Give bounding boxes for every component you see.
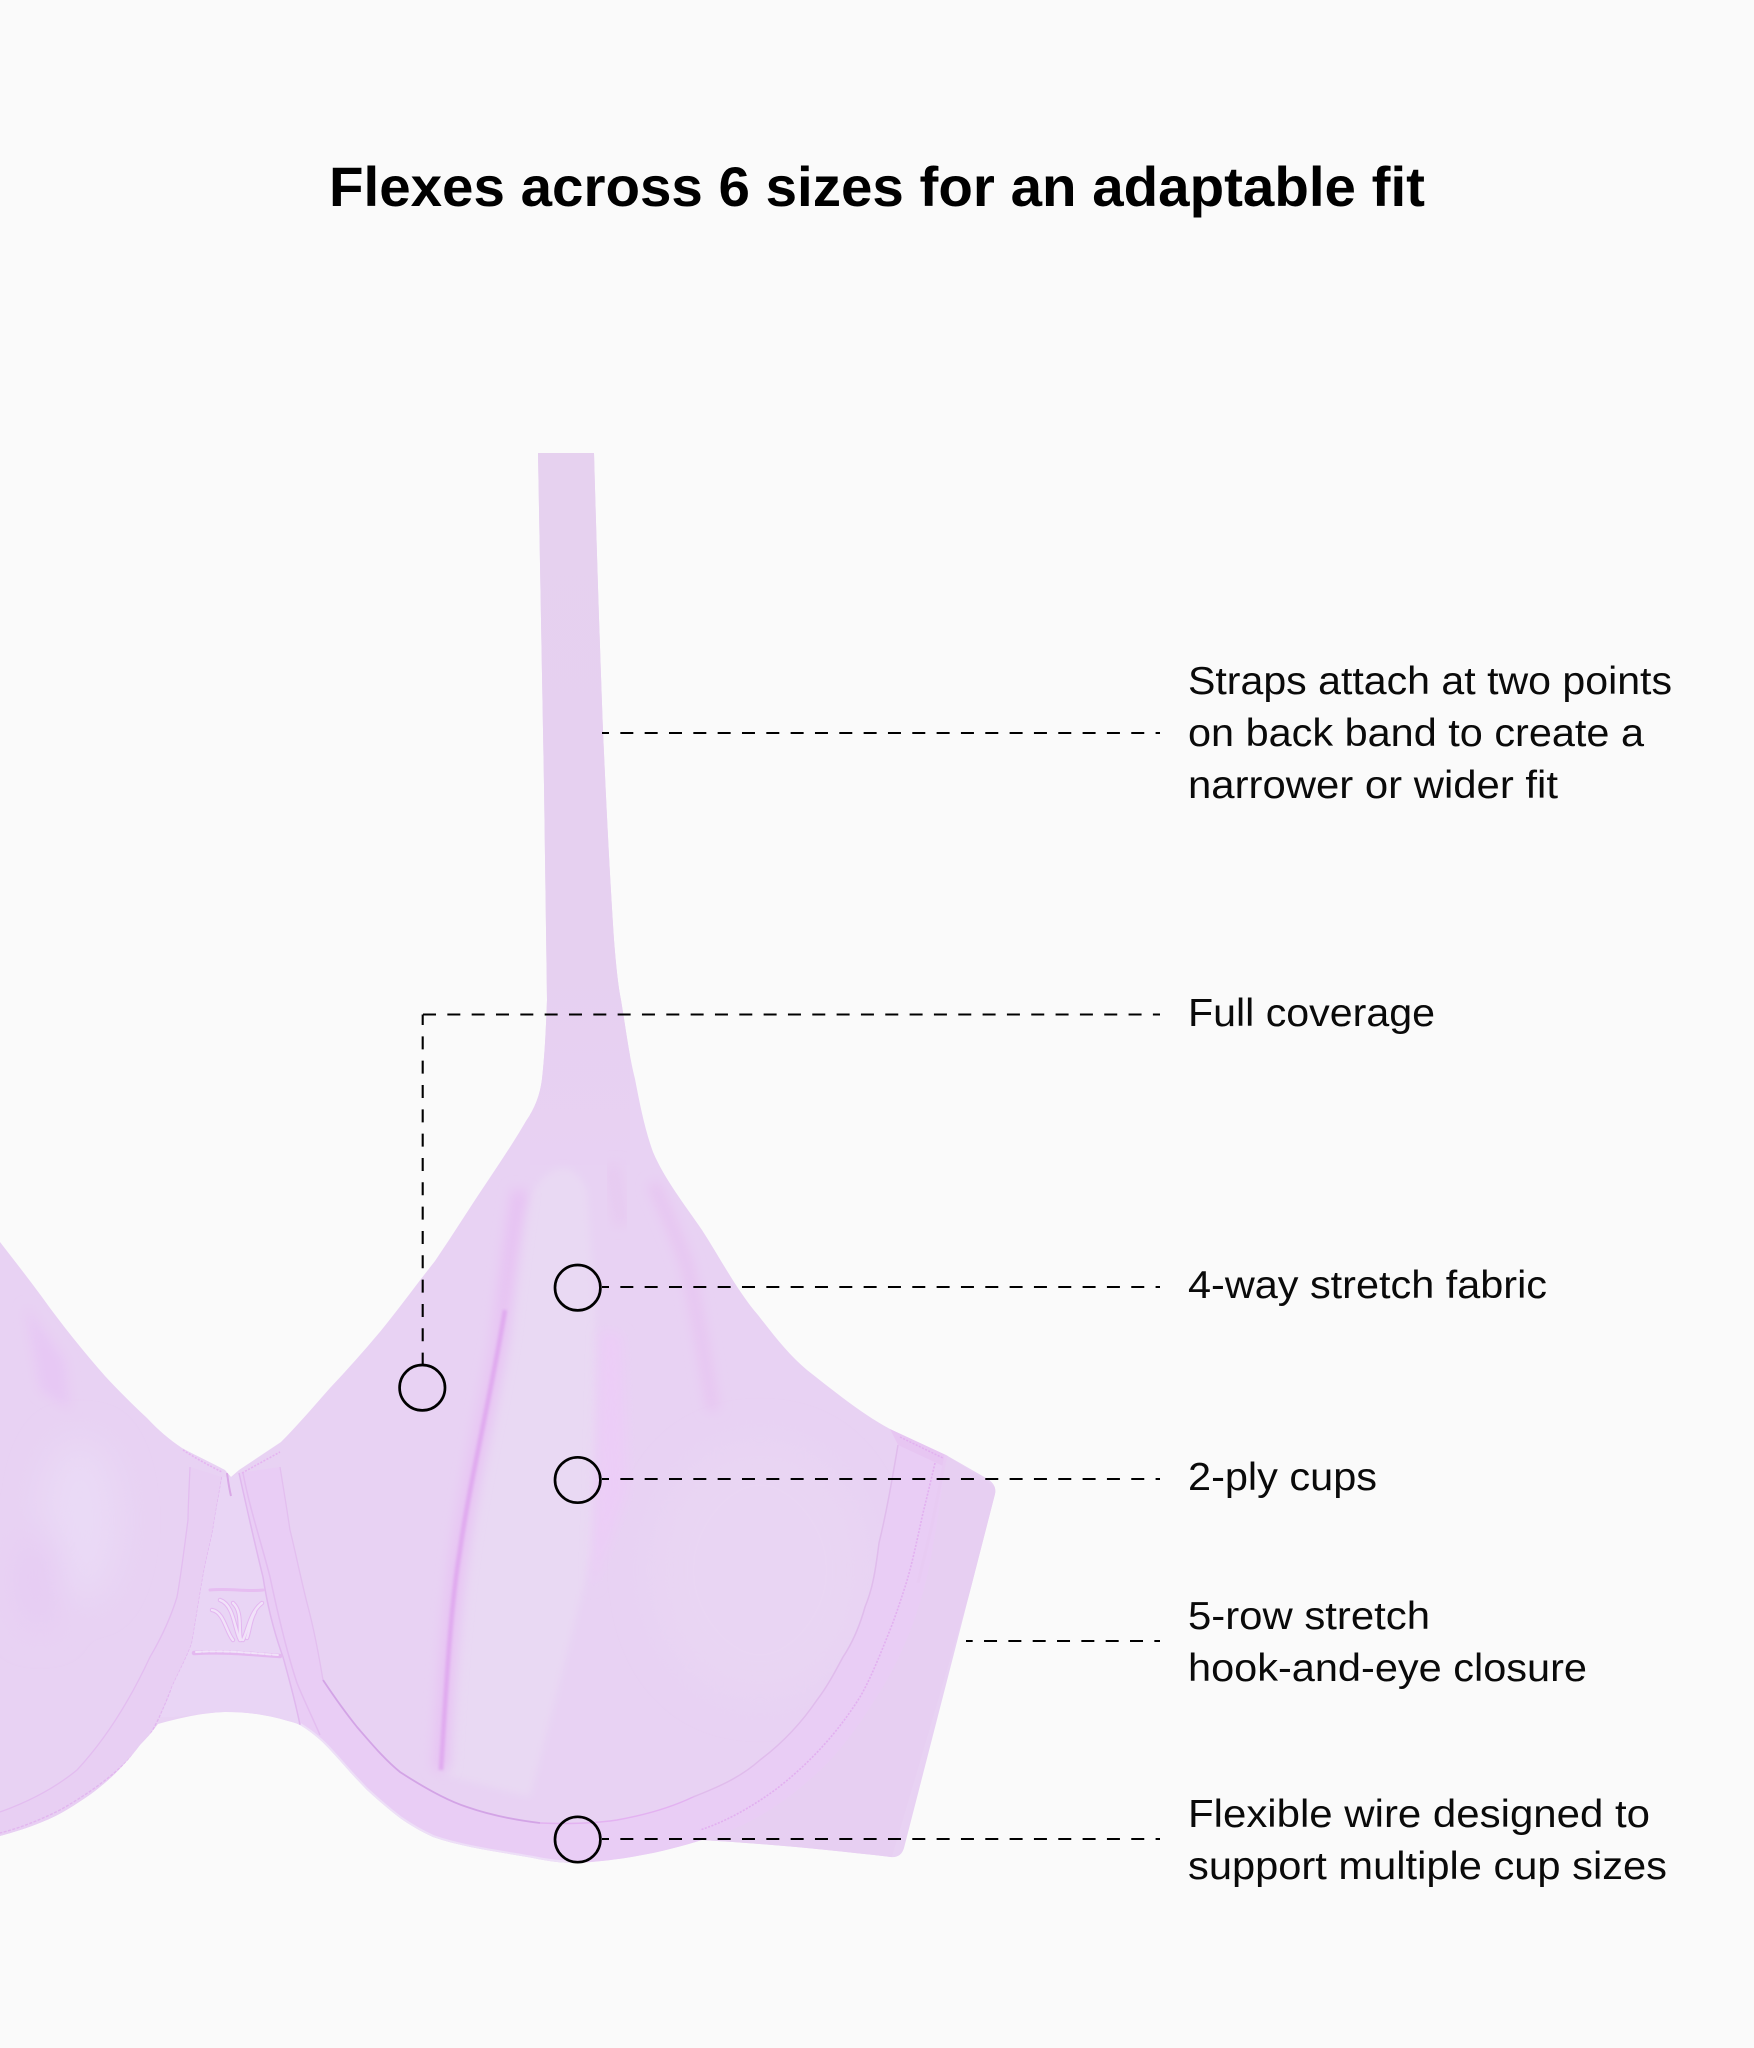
main cup fold <box>441 1190 520 1770</box>
label: straps: Straps attach at two points <box>1188 660 1672 703</box>
label: 2-ply cups: 2-ply cups <box>1188 1456 1377 1499</box>
label: hook-and-eye closure: 5-row stretch <box>1188 1595 1430 1638</box>
label: hook-and-eye closure: hook-and-eye closure <box>1188 1647 1587 1690</box>
leader: hook-and-eye closure <box>966 1640 1160 1642</box>
leader: 4-way stretch marker <box>555 1265 1160 1310</box>
channel inner seam <box>693 1445 898 1797</box>
top stitched edges at the centre gore <box>183 1450 222 1472</box>
strap gather streaks <box>653 1183 713 1410</box>
leader: straps <box>602 732 1160 734</box>
label: full coverage: Full coverage <box>1188 992 1435 1035</box>
label: hook-and-eye closure <box>1188 1595 1587 1690</box>
left wire channel <box>0 1758 130 1836</box>
title: Flexes across 6 sizes for an adaptable fit <box>329 155 1425 218</box>
garment: lilac underwire bra <box>0 440 1010 1870</box>
label: straps: narrower or wider fit <box>1188 764 1558 807</box>
top tab of channel <box>890 1429 944 1454</box>
bridge seams <box>239 1473 300 1725</box>
right wire channel <box>586 1840 701 1862</box>
leader: 2-ply cups marker <box>555 1457 1160 1503</box>
left cup streak <box>37 1338 62 1394</box>
label: straps: on back band to create a <box>1188 712 1644 755</box>
light centre panel <box>445 1169 597 1797</box>
wing fold shadow <box>944 1456 948 1460</box>
wing panel beyond channel <box>706 1487 996 1857</box>
channel stitch line <box>700 1463 935 1830</box>
bridge centre slit <box>227 1473 231 1496</box>
label: straps <box>1188 660 1672 807</box>
saturated vertical band <box>592 1330 628 1590</box>
embroidered logo <box>194 1589 280 1656</box>
outer pale edge of wire channel <box>300 1725 577 1863</box>
label: flexible wire: Flexible wire designed to <box>1188 1793 1650 1836</box>
leader: flexible wire marker <box>555 1817 1160 1862</box>
leader: full coverage with marker <box>400 1014 1160 1410</box>
bridge panel <box>160 1473 300 1725</box>
label: flexible wire: support multiple cup sizes <box>1188 1845 1667 1888</box>
label: 4-way stretch fabric: 4-way stretch fabric <box>1188 1264 1547 1307</box>
label: flexible wire <box>1188 1793 1667 1888</box>
